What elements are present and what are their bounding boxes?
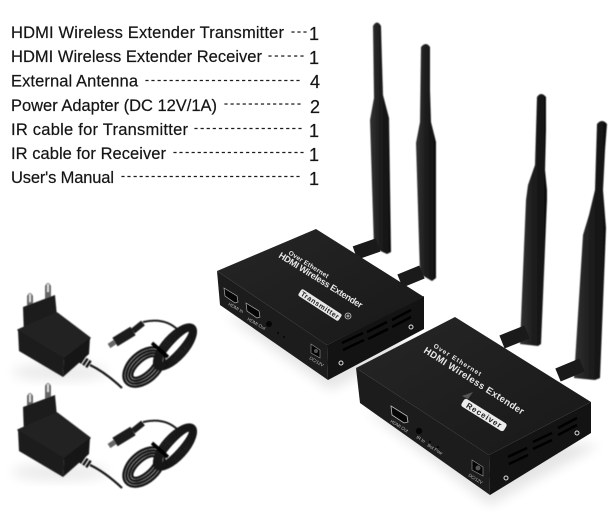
box front bbox=[356, 368, 490, 495]
row: receiver: ------ bbox=[268, 48, 304, 62]
label: HDMI wireless extender: HDMI Wireless Extender bbox=[421, 345, 526, 418]
IR jack and LEDs: Bot Pow bbox=[426, 443, 444, 456]
shadow bbox=[225, 315, 420, 390]
box right bbox=[327, 296, 424, 380]
shadow bbox=[12, 463, 108, 481]
antenna stub 1 bbox=[355, 245, 378, 253]
prongs bbox=[27, 283, 51, 314]
vents bbox=[508, 418, 577, 464]
row: manual: 1 bbox=[309, 169, 319, 189]
screws bbox=[504, 431, 579, 480]
row: power adapter: 2 bbox=[310, 97, 320, 117]
row: manual: ------------------------------ bbox=[121, 168, 300, 182]
row: IR receiver: 1 bbox=[309, 145, 319, 165]
antenna 4 bbox=[574, 121, 607, 380]
HDMI port 1 bbox=[224, 288, 245, 314]
row: receiver: HDMI Wireless Extender Receiver bbox=[11, 48, 262, 66]
row: antenna bbox=[11, 72, 320, 92]
strain relief bbox=[72, 353, 90, 365]
shadow bbox=[365, 410, 600, 505]
row: IR receiver: ---------------------- bbox=[173, 144, 304, 158]
DC port bbox=[467, 460, 483, 485]
screw bbox=[339, 325, 413, 365]
row: manual: User's Manual bbox=[11, 169, 114, 187]
power adapter 1 bbox=[12, 283, 203, 394]
shadow bbox=[12, 363, 108, 381]
DC plug bbox=[109, 423, 143, 446]
cable bbox=[90, 365, 122, 388]
adapter body bbox=[18, 313, 90, 377]
wifi icon bbox=[345, 313, 351, 319]
label: over ethernet: Over Ethernet bbox=[287, 250, 330, 281]
row: power adapter bbox=[11, 96, 320, 117]
vents bbox=[342, 310, 411, 350]
transmitter pill: Transmitter bbox=[299, 291, 340, 321]
row: transmitter: HDMI Wireless Extender Transmitter bbox=[11, 24, 284, 42]
IR jack and LEDs bbox=[266, 321, 285, 338]
receiver unit bbox=[356, 94, 607, 505]
box right bbox=[489, 402, 591, 495]
HDMI port 1: HDMI In bbox=[228, 302, 245, 314]
IR jack and LEDs bbox=[415, 428, 444, 456]
DC port: DC/12V bbox=[467, 473, 483, 485]
row: IR transmitter: IR cable for Transmitter bbox=[11, 121, 188, 139]
label: over ethernet: Over Ethernet bbox=[432, 343, 483, 378]
strain relief bbox=[72, 453, 90, 465]
row: IR transmitter: ------------------ bbox=[194, 120, 302, 134]
row: receiver: 1 bbox=[309, 48, 319, 68]
HDMI port 2: HDMI Out bbox=[246, 317, 267, 331]
IR jack and LEDs: IR In bbox=[415, 435, 427, 444]
row: power adapter: Power Adapter (DC 12V/1A) bbox=[11, 97, 217, 115]
row: antenna: 4 bbox=[310, 72, 320, 92]
row: power adapter: ------------- bbox=[224, 96, 301, 110]
antenna 3 bbox=[520, 94, 547, 346]
DC plug bbox=[109, 323, 143, 346]
transmitter unit bbox=[217, 22, 436, 390]
power adapter 2 bbox=[12, 383, 203, 494]
prongs bbox=[27, 383, 51, 414]
row: IR receiver: IR cable for Receiver bbox=[11, 145, 166, 163]
row: transmitter: 1 bbox=[309, 24, 319, 44]
antenna 2 bbox=[416, 44, 436, 281]
row: manual bbox=[11, 168, 319, 189]
row: transmitter: --- bbox=[291, 24, 307, 38]
antenna stub 4 bbox=[558, 365, 582, 375]
HDMI port: HDMI Out bbox=[389, 419, 410, 434]
box top bbox=[217, 229, 424, 345]
DC port bbox=[308, 344, 325, 368]
row: IR receiver bbox=[11, 144, 319, 165]
adapter body bbox=[18, 413, 90, 477]
label: HDMI wireless extender: HDMI Wireless Extender bbox=[277, 250, 365, 310]
receiver pill bbox=[460, 398, 508, 432]
cable bbox=[90, 465, 122, 488]
box top bbox=[356, 317, 591, 455]
row: antenna: External Antenna bbox=[11, 72, 139, 90]
HDMI port 2 bbox=[246, 303, 267, 331]
contents list bbox=[11, 24, 320, 189]
HDMI port bbox=[389, 406, 410, 434]
cable coil bbox=[116, 318, 203, 394]
antenna stub 2 bbox=[400, 272, 422, 281]
plug base bbox=[23, 395, 57, 436]
box front bbox=[217, 271, 328, 380]
row: IR transmitter: 1 bbox=[309, 121, 319, 141]
antenna stub 3 bbox=[502, 332, 527, 342]
cable coil bbox=[116, 418, 203, 494]
plug base bbox=[23, 295, 57, 336]
DC port: DC/12V bbox=[308, 356, 325, 368]
row: IR transmitter bbox=[11, 120, 319, 141]
antenna 1 bbox=[370, 22, 391, 254]
receiver pill: Receiver bbox=[464, 401, 503, 430]
wifi icon bbox=[462, 392, 473, 399]
row: antenna: -------------------------- bbox=[145, 72, 300, 86]
